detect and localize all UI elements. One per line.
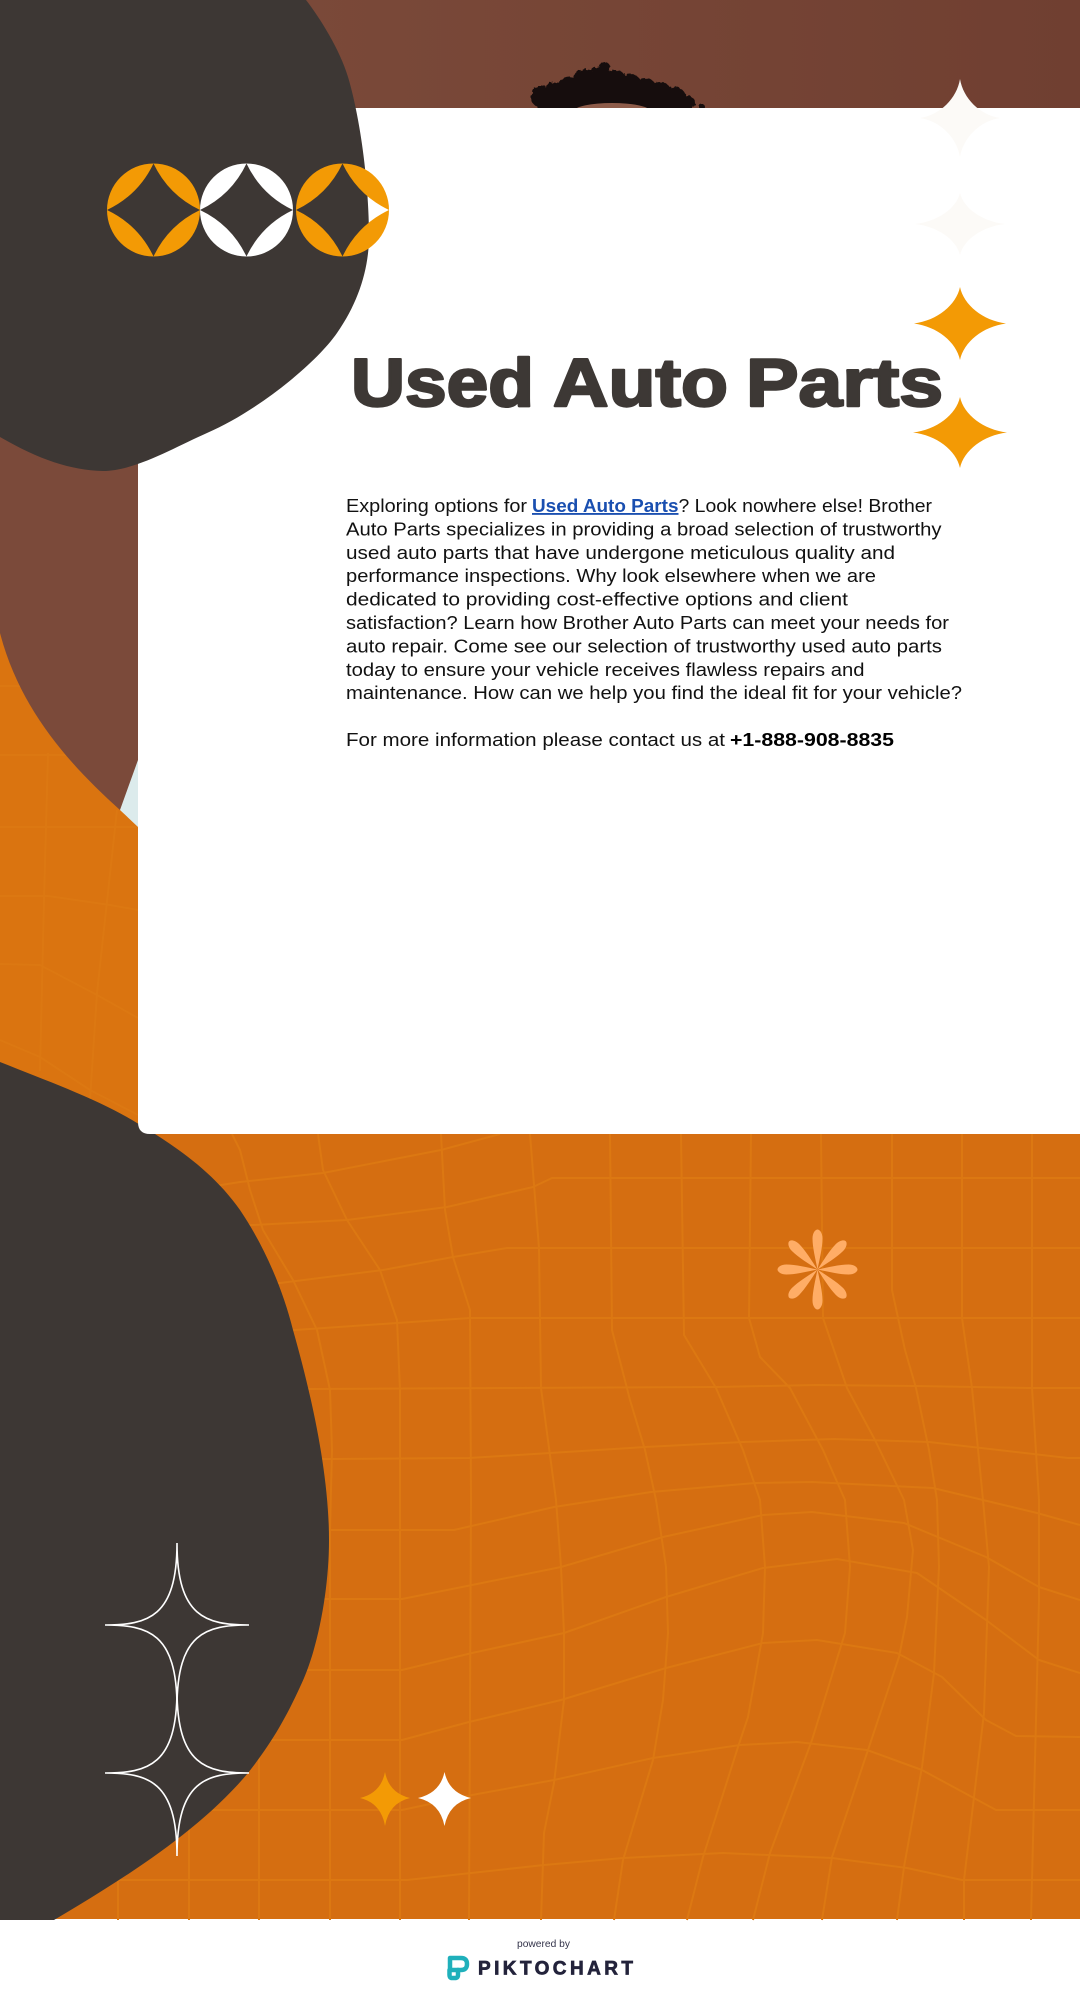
body paragraph: today to ensure your vehicle receives flawless repairs and: [346, 659, 864, 680]
body paragraph: ? Look nowhere else! Brother: [678, 495, 932, 516]
photo: top brown backdrop: [0, 0, 1080, 120]
body paragraph: [346, 495, 962, 703]
photo: forehead: [574, 103, 650, 119]
photo: hair: [531, 62, 705, 112]
footer: piktochart wordmark: PIKTOCHART: [478, 1958, 633, 1980]
contact line: +1-888-908-8835: [730, 729, 894, 750]
grid texture: [0, 686, 1080, 1920]
body paragraph: performance inspections. Why look elsewhere when we are: [346, 565, 876, 586]
icon: small orange star: [360, 1772, 410, 1826]
white content card: [138, 108, 1080, 1134]
footer: piktochart logo mark: [450, 1958, 467, 1978]
photo: shirt sliver: [120, 760, 138, 827]
upper dark blob: [0, 0, 369, 471]
icon: pale star 2: [915, 193, 1005, 255]
body paragraph: Exploring options for: [346, 495, 527, 516]
body paragraph: used auto parts that have undergone meticulous quality and: [346, 542, 895, 563]
icon: peach asterisk flower: [778, 1230, 858, 1310]
body paragraph: satisfaction? Learn how Brother Auto Parts can meet your needs for: [346, 612, 949, 633]
footer background: [0, 1919, 1080, 2000]
body paragraph: Auto Parts specializes in providing a broad selection of trustworthy: [346, 518, 942, 539]
title: Used: [351, 345, 534, 421]
icon: orange star 1: [914, 287, 1006, 360]
lower dark blob: [0, 1062, 329, 1920]
icon: three circle star motif: [107, 163, 389, 257]
icon: orange star 2: [913, 397, 1007, 468]
icon: white outline stars: [105, 1543, 249, 1856]
contact line: [346, 729, 894, 750]
title: Parts: [746, 345, 943, 421]
icon: pale star 1: [920, 79, 1000, 157]
title: Auto: [553, 345, 728, 421]
icon: small white star: [418, 1772, 471, 1826]
photo: left brown backdrop: [0, 400, 140, 810]
body paragraph: auto repair. Come see our selection of trustworthy used auto parts: [346, 635, 942, 656]
orange background: [0, 400, 1080, 1919]
upper left orange tint: [0, 400, 140, 1130]
title: [351, 345, 943, 421]
footer: powered by: powered by: [517, 1938, 571, 1950]
body paragraph: dedicated to providing cost-effective options and client: [346, 589, 848, 610]
contact line: For more information please contact us at: [346, 729, 725, 750]
body paragraph: maintenance. How can we help you find the ideal fit for your vehicle?: [346, 682, 962, 703]
body paragraph: Used Auto Parts: [532, 495, 678, 516]
